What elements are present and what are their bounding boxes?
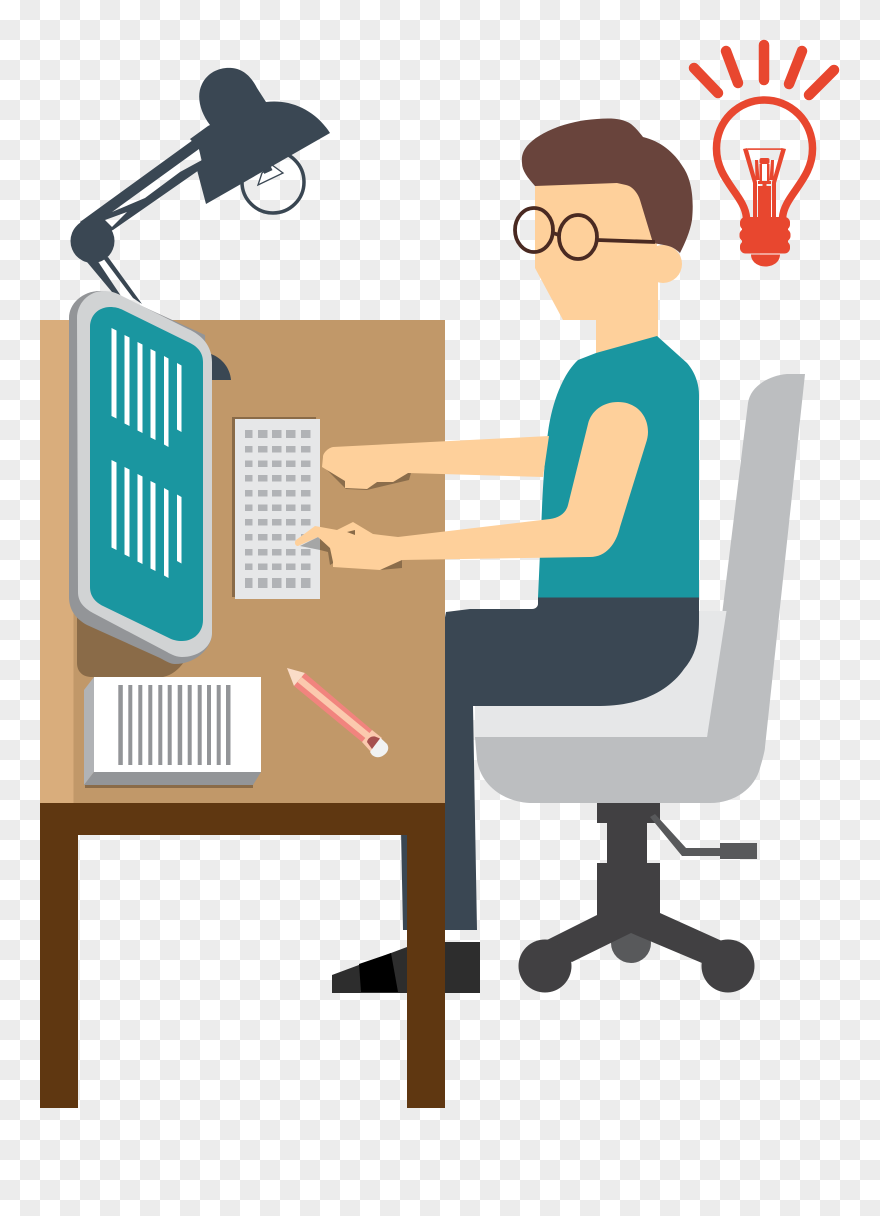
pencil xyxy=(287,668,388,757)
ear xyxy=(644,245,682,283)
monitor frame xyxy=(77,291,212,657)
person xyxy=(332,119,699,993)
keyboard xyxy=(232,417,320,599)
pencil body xyxy=(294,673,372,742)
keyboard shadow xyxy=(232,417,316,597)
paper shadow xyxy=(85,784,253,788)
chair base xyxy=(518,803,754,992)
lamp foot xyxy=(211,354,231,380)
bulb glass xyxy=(716,100,813,218)
bulb filament xyxy=(743,148,786,218)
bulb rays xyxy=(694,45,834,95)
paper bottom xyxy=(84,772,261,785)
icon: light bulb idea xyxy=(694,45,834,266)
desk lamp xyxy=(70,68,330,304)
pencil stripe xyxy=(300,680,368,736)
hands shadows xyxy=(300,469,411,570)
pencil eraser xyxy=(370,738,388,757)
paper side xyxy=(84,677,94,785)
chair cushion xyxy=(475,611,726,737)
desk top xyxy=(40,320,445,804)
lamp shade xyxy=(190,68,330,204)
lamp bulb xyxy=(242,151,304,213)
trousers xyxy=(401,597,699,930)
pencil ferrule xyxy=(362,730,382,752)
chair centre wheel xyxy=(611,923,651,963)
desk xyxy=(40,320,445,1108)
keys xyxy=(245,430,310,588)
paper face xyxy=(94,677,261,772)
monitor screen xyxy=(90,307,203,641)
bulb base xyxy=(740,217,790,266)
stack of papers xyxy=(84,677,261,788)
monitor xyxy=(69,291,212,664)
pencil tip xyxy=(287,668,305,686)
keyboard body xyxy=(235,419,320,599)
desk front and legs xyxy=(40,803,445,1108)
office chair xyxy=(475,374,805,992)
shoe xyxy=(332,942,480,993)
lamp lower arm xyxy=(87,257,142,304)
paper text lines xyxy=(118,685,230,765)
hair xyxy=(522,119,693,253)
lamp elbow joint xyxy=(70,219,114,263)
neck and face xyxy=(535,180,658,360)
glasses xyxy=(515,208,655,259)
desk left edge highlight xyxy=(40,320,74,804)
upper forearm and hand xyxy=(322,436,549,489)
chair seat and back xyxy=(475,374,805,803)
lower arm and hand xyxy=(295,402,648,570)
monitor shadow xyxy=(77,617,184,677)
chair lever xyxy=(650,814,757,859)
monitor back edge xyxy=(69,291,212,664)
lamp upper arm xyxy=(80,140,206,238)
finger detail xyxy=(347,530,355,535)
pencil band xyxy=(367,736,380,749)
screen text lines xyxy=(112,328,182,578)
t-shirt xyxy=(538,336,699,598)
